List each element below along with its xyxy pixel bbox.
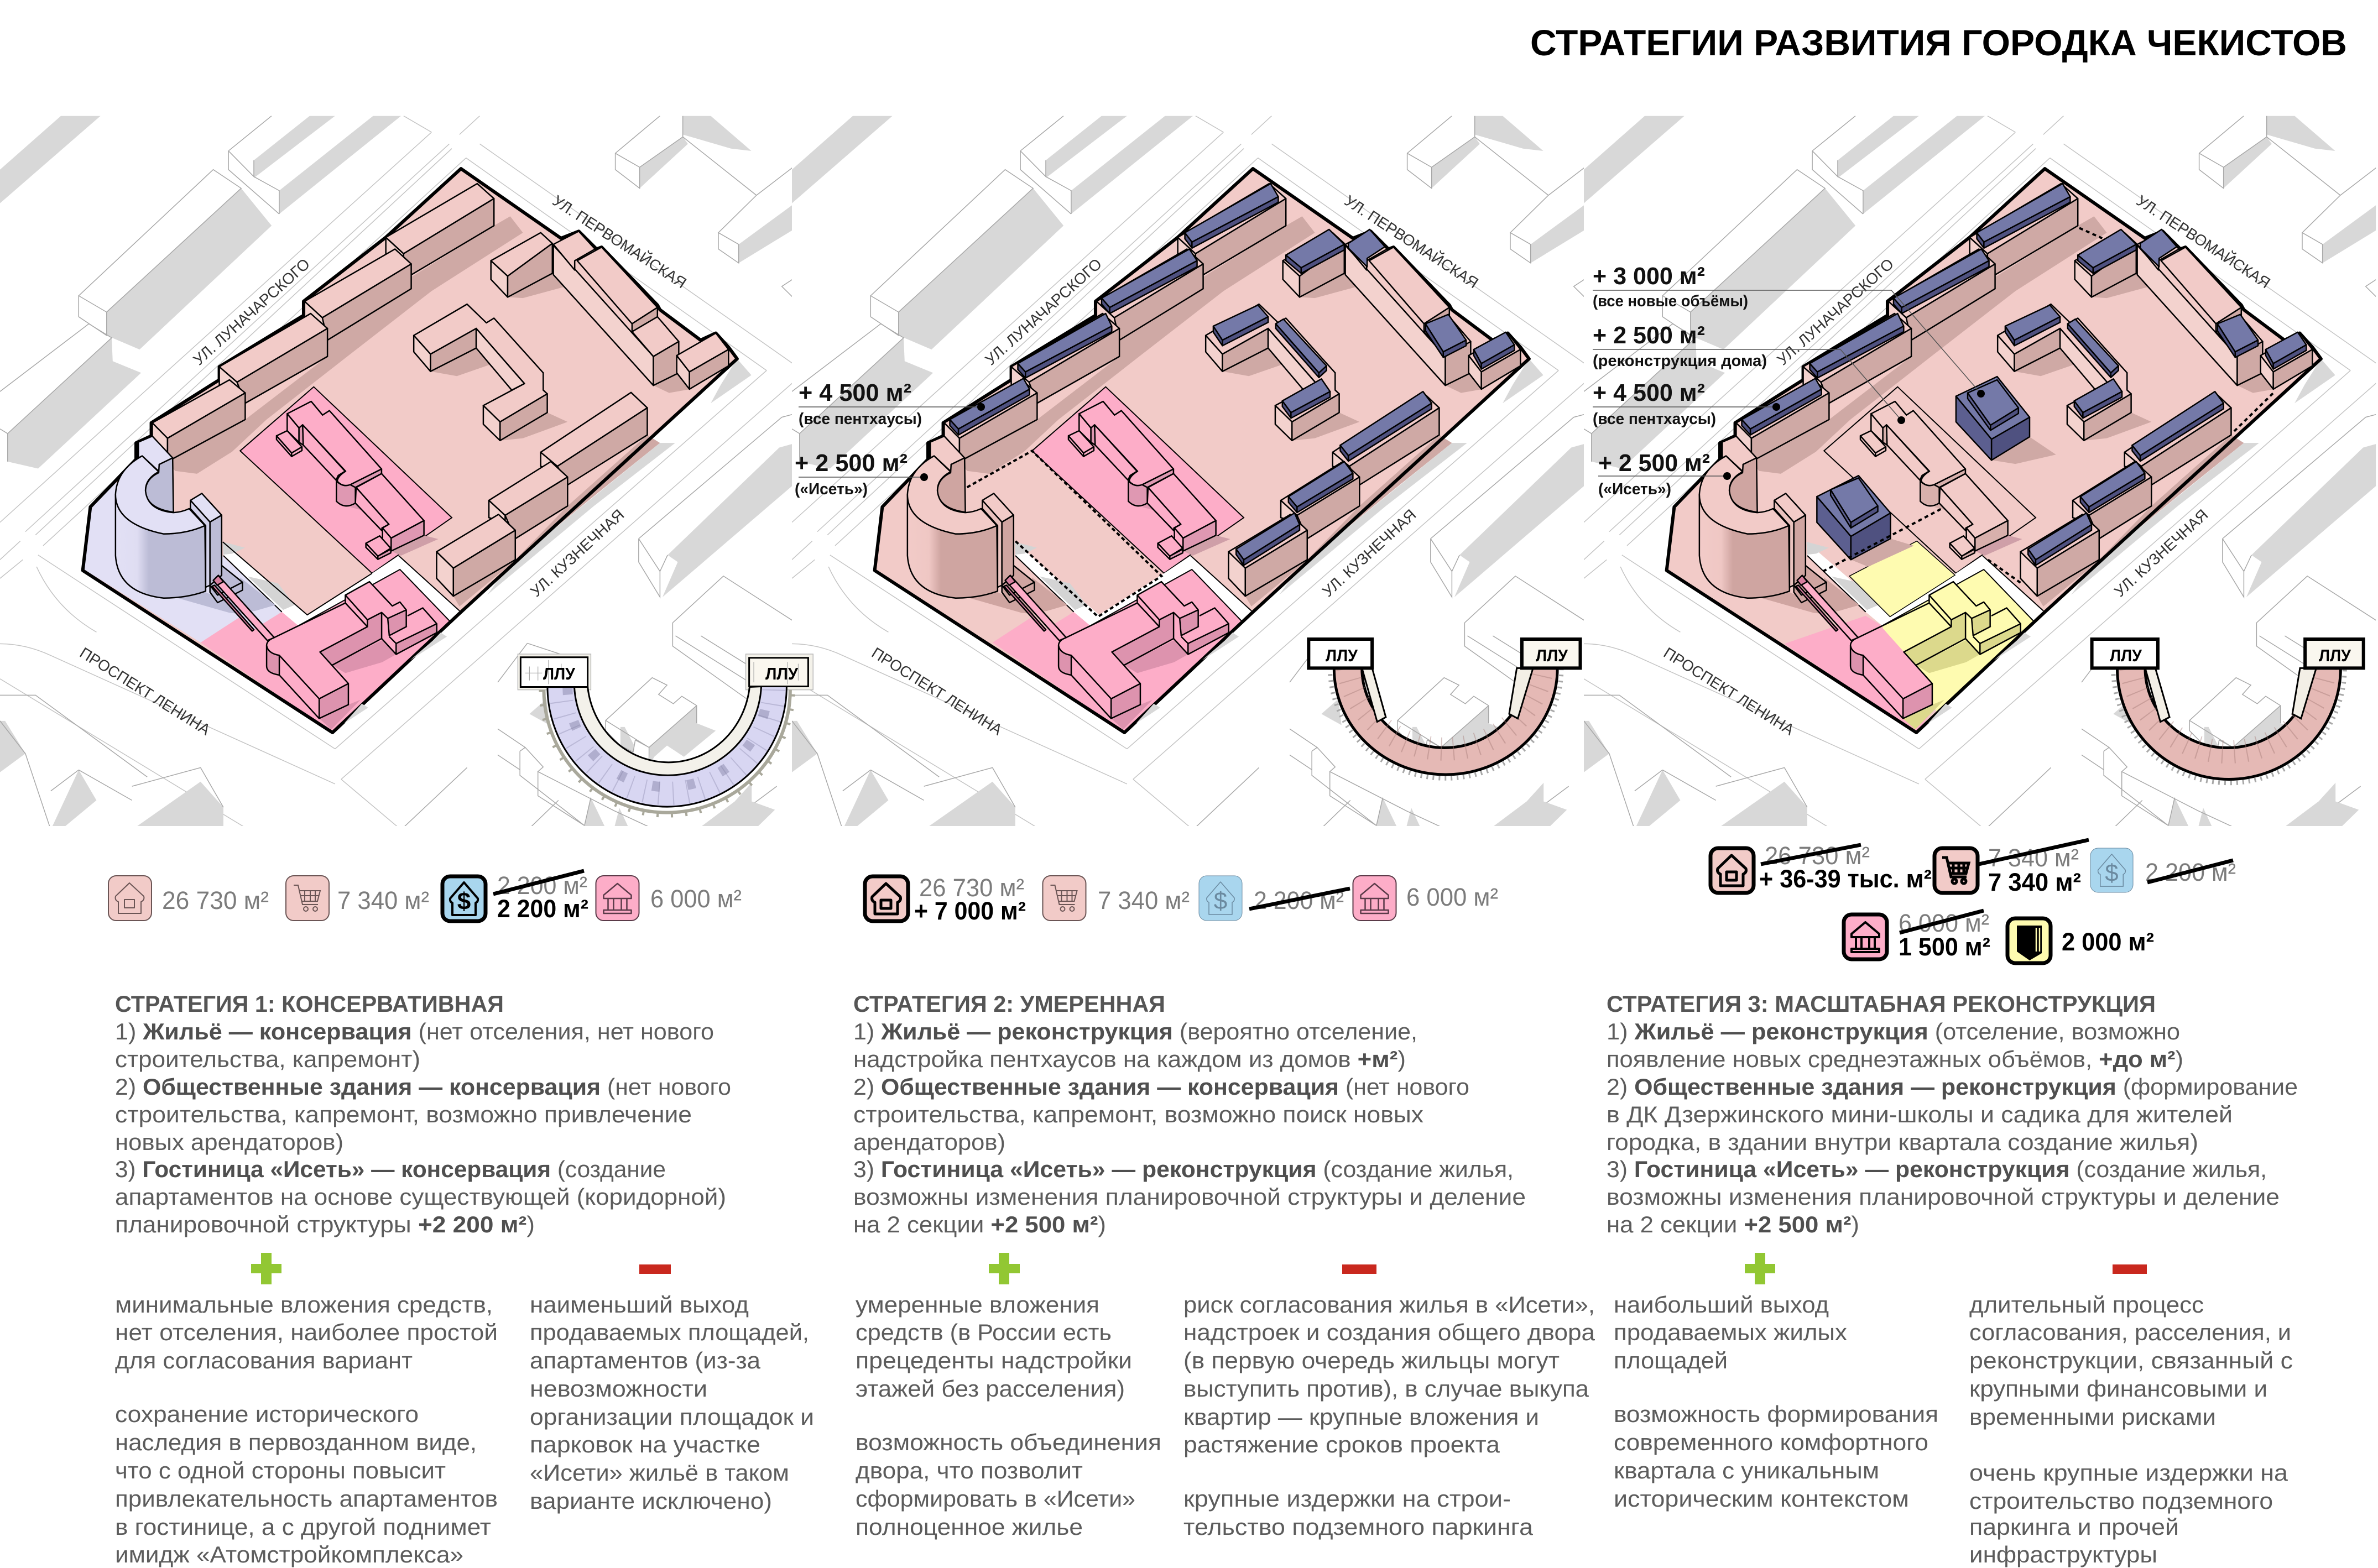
callouts: strategy 3: (реконструкция дома)	[1593, 352, 1767, 370]
advantages: strategy 3: продаваемых жилых	[1614, 1319, 1847, 1345]
stats row: strategy 3: 2 000 м²	[2062, 928, 2154, 956]
panel: strategy 3 axonometric map	[1584, 116, 2378, 830]
description: strategy 1: 2) Общественные здания — консервация (нет нового	[115, 1074, 731, 1100]
callouts: strategy 2	[795, 379, 985, 498]
stats row: strategy 3: 7 340 м²	[1988, 868, 2081, 896]
disadvantages: strategy 2: растяжение сроков проекта	[1183, 1431, 1500, 1457]
disadvantages: strategy 3: очень крупные издержки на	[1969, 1460, 2288, 1486]
advantages: strategy 1: наследия в первозданном виде,	[115, 1429, 477, 1455]
disadvantages: strategy 3: длительный процесс	[1969, 1292, 2204, 1318]
advantages: strategy 1: привлекательность апартаментов	[115, 1486, 498, 1512]
advantages: strategy 1: сохранение исторического	[115, 1401, 419, 1427]
disadvantages: strategy 2: (в первую очередь жильцы могут	[1183, 1347, 1560, 1373]
callouts: strategy 2: (все пентхаусы)	[799, 410, 922, 428]
street labels 1: УЛ. ПЕРВОМАЙСКАЯ	[550, 192, 690, 291]
stats row: strategy 2: 6 000 м²	[1406, 883, 1498, 911]
new volume: south tower	[1817, 475, 1890, 560]
advantages: strategy 3: площадей	[1614, 1347, 1728, 1373]
callouts: strategy 2: + 2 500 м²	[795, 450, 908, 477]
stats row: strategy 1: 7 340 м²	[337, 886, 429, 914]
description: strategy 3	[1607, 1018, 2298, 1237]
stats row: strategy 1: 2 200 м²	[497, 871, 587, 900]
heading: strategy 3: СТРАТЕГИЯ 3: МАСШТАБНАЯ РЕКОНСТРУКЦИЯ	[1607, 991, 2156, 1017]
stats row: strategy 1	[108, 871, 742, 923]
disadvantages: strategy 1: продаваемых площадей,	[530, 1319, 809, 1345]
advantages: strategy 3: наибольший выход	[1614, 1292, 1829, 1318]
disadvantages: strategy 1: организации площадок и	[530, 1404, 814, 1430]
description: strategy 1: строительства, капремонт, возможно привлечение	[115, 1101, 692, 1127]
description: strategy 2: 2) Общественные здания — консервация (нет нового	[853, 1074, 1469, 1100]
floor plan 3 with ЛЛУ	[2092, 639, 2364, 783]
floor plan 3 with ЛЛУ: ЛЛУ	[2110, 646, 2142, 665]
advantages: strategy 2: средств (в России есть	[856, 1319, 1112, 1345]
street labels 3	[1661, 192, 2273, 739]
new volume: courtyard tower	[1956, 377, 2030, 460]
description: strategy 3: городка, в здании внутри квартала создание жилья)	[1607, 1129, 2198, 1155]
plus sign	[251, 1253, 281, 1284]
disadvantages: strategy 2: крупные издержки на строи-	[1183, 1486, 1511, 1512]
advantages: strategy 1: нет отселения, наиболее простой	[115, 1319, 498, 1345]
street labels 1: УЛ. КУЗНЕЧНАЯ	[527, 506, 628, 600]
disadvantages: strategy 3: паркинга и прочей	[1969, 1514, 2179, 1540]
text column: strategy 3	[1607, 991, 2298, 1567]
stats row: strategy 2: 7 340 м²	[1098, 886, 1190, 914]
minus sign	[1342, 1264, 1376, 1274]
disadvantages: strategy 2	[1183, 1292, 1595, 1540]
advantages: strategy 1: минимальные вложения средств,	[115, 1292, 493, 1318]
description: strategy 2: строительства, капремонт, возможно поиск новых	[853, 1101, 1423, 1127]
stats row: strategy 3: 1 500 м²	[1899, 933, 1990, 961]
description: strategy 3: 3) Гостиница «Исеть» — реконструкция (создание жилья,	[1607, 1156, 2267, 1182]
street labels 3: УЛ. ЛУНАЧАРСКОГО	[1774, 255, 1897, 368]
disadvantages: strategy 2: выступить против), в случае выкупа	[1183, 1376, 1589, 1402]
plus sign	[989, 1253, 1020, 1284]
street labels 2	[869, 192, 1482, 739]
description: strategy 2	[853, 1018, 1526, 1237]
advantages: strategy 1: имидж «Атомстройкомплекса»	[115, 1541, 463, 1567]
advantages: strategy 3: современного комфортного	[1614, 1429, 1928, 1455]
disadvantages: strategy 1: парковок на участке	[530, 1431, 760, 1457]
disadvantages: strategy 3: строительство подземного	[1969, 1488, 2273, 1514]
street labels 3: УЛ. КУЗНЕЧНАЯ	[2111, 506, 2212, 600]
stats row: strategy 3: 6 000 м²	[1899, 909, 1989, 937]
disadvantages: strategy 2: надстроек и создания общего двора	[1183, 1319, 1595, 1345]
description: strategy 1: новых арендаторов)	[115, 1129, 343, 1155]
disadvantages: strategy 3	[1969, 1292, 2293, 1567]
description: strategy 1: 3) Гостиница «Исеть» — консервация (создание	[115, 1156, 666, 1182]
text column: strategy 2	[853, 991, 1595, 1540]
heading: strategy 2: СТРАТЕГИЯ 2: УМЕРЕННАЯ	[853, 991, 1165, 1017]
disadvantages: strategy 3: временными рисками	[1969, 1404, 2216, 1430]
floor plan 3 with ЛЛУ: ЛЛУ	[2319, 646, 2351, 665]
stats row: strategy 3: 26 730 м²	[1765, 842, 1870, 870]
advantages: strategy 2	[856, 1292, 1161, 1540]
advantages: strategy 2: умеренные вложения	[856, 1292, 1099, 1318]
disadvantages: strategy 3: инфраструктуры	[1969, 1541, 2157, 1567]
street labels 2: ПРОСПЕКТ ЛЕНИНА	[869, 644, 1005, 739]
floor plan 1 with ЛЛУ: ЛЛУ	[765, 664, 799, 683]
callouts: strategy 3: + 3 000 м²	[1593, 263, 1705, 290]
floor plan 2 with ЛЛУ: ЛЛУ	[1536, 646, 1568, 665]
advantages: strategy 2: полноценное жилье	[856, 1514, 1083, 1540]
advantages: strategy 1: в гостинице, а с другой поднимет	[115, 1514, 491, 1540]
street labels 1: УЛ. ЛУНАЧАРСКОГО	[190, 255, 313, 368]
stats row: strategy 3	[1711, 840, 2236, 963]
street labels 1: ПРОСПЕКТ ЛЕНИНА	[77, 644, 213, 739]
advantages: strategy 3	[1614, 1292, 1938, 1512]
advantages: strategy 2: возможность объединения	[856, 1429, 1161, 1455]
disadvantages: strategy 1: апартаментов (из-за	[530, 1347, 761, 1373]
advantages: strategy 3: возможность формирования	[1614, 1401, 1938, 1427]
advantages: strategy 3: историческим контекстом	[1614, 1486, 1909, 1512]
description: strategy 2: возможны изменения планировочной структуры и деление	[853, 1184, 1526, 1210]
advantages: strategy 1: для согласования вариант	[115, 1347, 413, 1373]
callouts: strategy 3	[1593, 263, 1985, 498]
description: strategy 3: 1) Жильё — реконструкция (отселение, возможно	[1607, 1018, 2180, 1044]
panel: strategy 1 axonometric map	[0, 116, 830, 830]
description: strategy 3: 2) Общественные здания — реконструкция (формирование	[1607, 1074, 2298, 1100]
stats row: strategy 1: 6 000 м²	[650, 885, 742, 913]
street labels 2: УЛ. ПЕРВОМАЙСКАЯ	[1342, 192, 1482, 291]
description: strategy 1: планировочной структуры +2 200 м²)	[115, 1211, 535, 1237]
stats row: strategy 3: 7 340 м²	[1988, 844, 2079, 872]
disadvantages: strategy 1: наименьший выход	[530, 1292, 749, 1318]
disadvantages: strategy 2: квартир — крупные вложения и	[1183, 1404, 1539, 1430]
disadvantages: strategy 3: реконструкции, связанный с	[1969, 1347, 2293, 1373]
stats row: strategy 1: 2 200 м²	[497, 895, 588, 923]
street labels 2: УЛ. КУЗНЕЧНАЯ	[1319, 506, 1420, 600]
callouts: strategy 2: («Исеть»)	[795, 480, 868, 498]
disadvantages: strategy 2: тельство подземного паркинга	[1183, 1514, 1534, 1540]
description: strategy 2: 3) Гостиница «Исеть» — реконструкция (создание жилья,	[853, 1156, 1514, 1182]
description: strategy 3: в ДК Дзержинского мини-школы и садика для жителей	[1607, 1101, 2233, 1127]
description: strategy 1: апартаментов на основе существующей (коридорной)	[115, 1184, 726, 1210]
description: strategy 1: 1) Жильё — консервация (нет отселения, нет нового	[115, 1018, 714, 1044]
heading: strategy 1: СТРАТЕГИЯ 1: КОНСЕРВАТИВНАЯ	[115, 991, 504, 1017]
minus sign	[639, 1264, 671, 1274]
description: strategy 3: появление новых среднеэтажных объёмов, +до м²)	[1607, 1046, 2183, 1072]
description: strategy 2: надстройка пентхаусов на каждом из домов +м²)	[853, 1046, 1406, 1072]
floor plan 2 with ЛЛУ	[1308, 639, 1580, 778]
text column: strategy 1	[115, 991, 814, 1567]
callouts: strategy 3: + 2 500 м²	[1598, 450, 1710, 477]
callouts: strategy 3: (все пентхаусы)	[1593, 410, 1716, 428]
disadvantages: strategy 1: «Исети» жильё в таком	[530, 1460, 789, 1486]
disadvantages: strategy 1: невозможности	[530, 1376, 707, 1402]
description: strategy 3: возможны изменения планировочной структуры и деление	[1607, 1184, 2280, 1210]
advantages: strategy 2: этажей без расселения)	[856, 1376, 1125, 1402]
disadvantages: strategy 1: варианте исключено)	[530, 1488, 772, 1514]
stats row: strategy 2	[865, 874, 1498, 925]
advantages: strategy 2: прецеденты надстройки	[856, 1347, 1132, 1373]
callouts: strategy 2: + 4 500 м²	[799, 379, 911, 406]
base city map 2	[792, 116, 1621, 830]
stats row: strategy 3: + 36-39 тыс. м²	[1759, 865, 1932, 893]
stats row: strategy 2: 2 200 м²	[1254, 886, 1344, 914]
minus sign	[2113, 1264, 2147, 1274]
disadvantages: strategy 1	[530, 1292, 814, 1514]
advantages: strategy 1: что с одной стороны повысит	[115, 1457, 446, 1483]
floor plan 1 with ЛЛУ: ЛЛУ	[543, 664, 576, 683]
disadvantages: strategy 2: риск согласования жилья в «Исети»,	[1183, 1292, 1595, 1318]
stats row: strategy 2: 26 730 м²	[919, 874, 1024, 902]
description: strategy 2: на 2 секции +2 500 м²)	[853, 1211, 1106, 1237]
callouts: strategy 3: + 4 500 м²	[1593, 379, 1705, 406]
disadvantages: strategy 3: крупными финансовыми и	[1969, 1376, 2267, 1402]
stats row: strategy 3: 2 200 м²	[2145, 858, 2236, 886]
title: СТРАТЕГИИ РАЗВИТИЯ ГОРОДКА ЧЕКИСТОВ	[1530, 22, 2347, 63]
stats row: strategy 2: + 7 000 м²	[914, 897, 1026, 925]
advantages: strategy 3: квартала с уникальным	[1614, 1457, 1879, 1483]
street labels 1	[77, 192, 690, 739]
base city map 1	[0, 116, 830, 830]
description: strategy 1: строительства, капремонт)	[115, 1046, 420, 1072]
stats row: strategy 1: 26 730 м²	[162, 886, 269, 914]
plus sign	[1745, 1253, 1775, 1284]
callouts: strategy 3: + 2 500 м²	[1593, 322, 1705, 349]
callouts: strategy 3: (все новые объёмы)	[1593, 292, 1748, 310]
description: strategy 2: арендаторов)	[853, 1129, 1005, 1155]
advantages: strategy 1	[115, 1292, 498, 1567]
description: strategy 2: 1) Жильё — реконструкция (вероятно отселение,	[853, 1018, 1417, 1044]
street labels 2: УЛ. ЛУНАЧАРСКОГО	[982, 255, 1105, 368]
floor plan 1 with ЛЛУ	[518, 654, 813, 816]
street labels 3: УЛ. ПЕРВОМАЙСКАЯ	[2134, 192, 2273, 291]
base city map 3	[1584, 116, 2378, 830]
disadvantages: strategy 3: согласования, расселения, и	[1969, 1319, 2291, 1345]
description: strategy 1	[115, 1018, 731, 1237]
advantages: strategy 2: сформировать в «Исети»	[856, 1486, 1135, 1512]
callouts: strategy 3: («Исеть»)	[1598, 480, 1671, 498]
description: strategy 3: на 2 секции +2 500 м²)	[1607, 1211, 1859, 1237]
advantages: strategy 2: двора, что позволит	[856, 1457, 1083, 1483]
street labels 3: ПРОСПЕКТ ЛЕНИНА	[1661, 644, 1797, 739]
floor plan 2 with ЛЛУ: ЛЛУ	[1326, 646, 1358, 665]
panel: strategy 2 axonometric map	[792, 116, 1621, 830]
